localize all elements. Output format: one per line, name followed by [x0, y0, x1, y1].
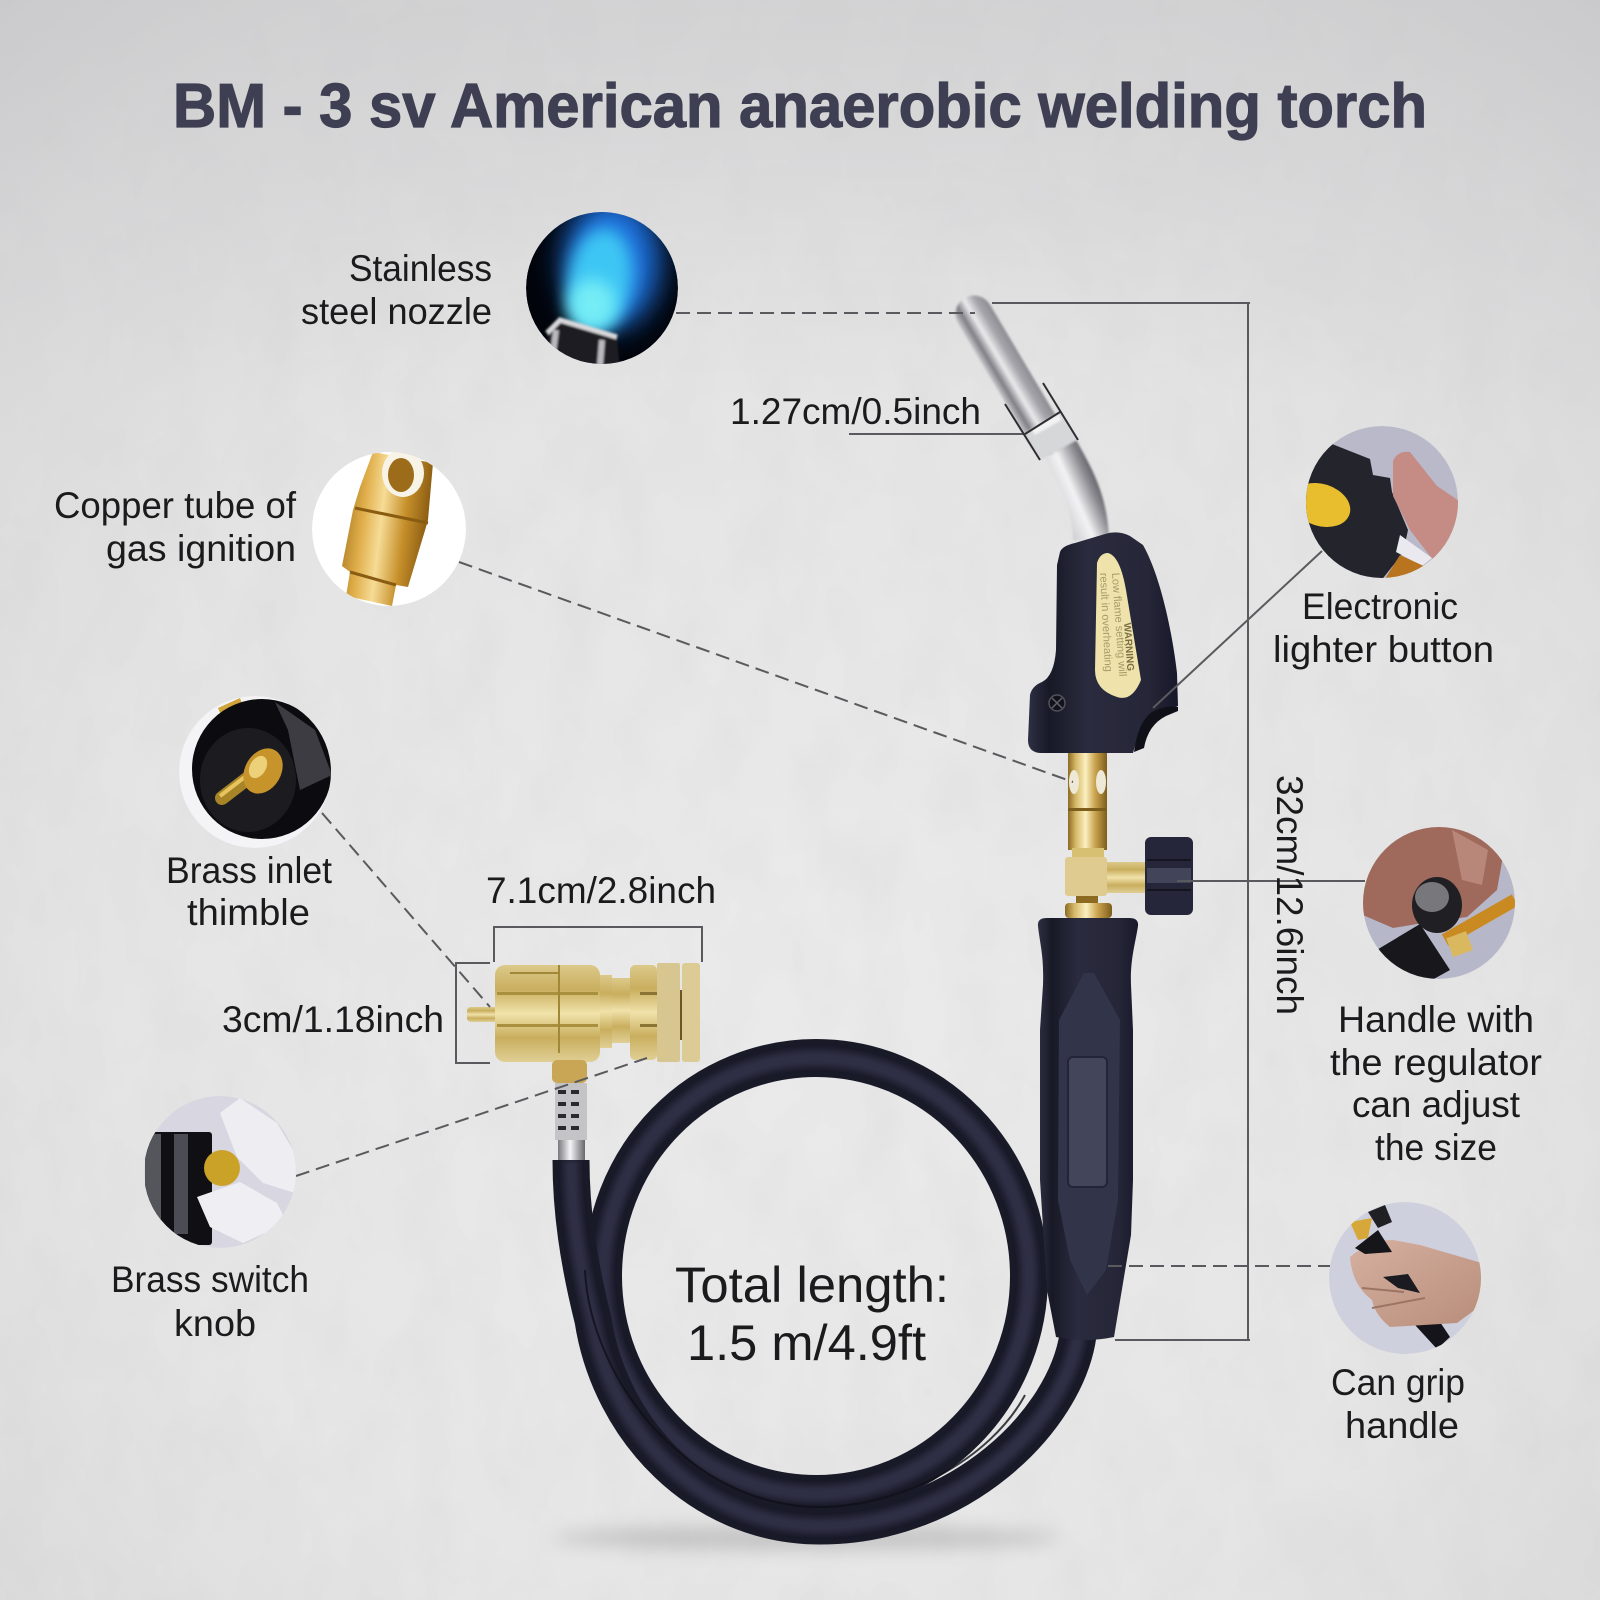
- icon: grip handle: [1329, 1202, 1484, 1354]
- label: Brass switch knob: [111, 1259, 309, 1344]
- regulator knob: [1145, 837, 1193, 915]
- label: Brass inlet thimble: [166, 850, 333, 933]
- icon: brass switch knob: [144, 1096, 297, 1248]
- brass tube below head: [1068, 753, 1107, 857]
- icon: copper tube: [312, 449, 466, 606]
- label: Stainless steel nozzle: [301, 248, 492, 332]
- dimension lines and leaders: [296, 303, 1365, 1340]
- warning label: WARNING: [1121, 622, 1135, 672]
- label: Brass switch knob: Brass switch: [111, 1259, 309, 1300]
- dimension label: connector diameter: 3cm/1.18inch: [222, 999, 444, 1040]
- label: Handle with the regulator: [1330, 999, 1542, 1168]
- title: BM - 3 sv American anaerobic welding torch: [173, 72, 1427, 141]
- label: Brass inlet thimble: Brass inlet: [166, 850, 333, 891]
- label: Can grip handle: handle: [1345, 1405, 1459, 1446]
- label: Handle with the regulator: can adjust: [1352, 1084, 1521, 1125]
- warning label: Low flame setting will: [1109, 572, 1128, 677]
- icon: brass inlet thimble: [179, 696, 332, 848]
- label: Electronic lighter button: lighter button: [1273, 629, 1494, 670]
- ground shadow: [551, 1527, 1061, 1549]
- label: Brass inlet thimble: thimble: [187, 892, 310, 933]
- warning label: [1095, 553, 1141, 698]
- brass regulator block: [1065, 857, 1145, 918]
- label: Handle with the regulator: the size: [1375, 1127, 1497, 1168]
- icon: electronic lighter button: [1306, 426, 1458, 578]
- icon: flame: [526, 212, 678, 364]
- torch head: [1028, 532, 1178, 753]
- total length callout: 1.5 m/4.9ft: [687, 1315, 926, 1371]
- total length callout: Total length:: [675, 1257, 949, 1313]
- label: Brass switch knob: knob: [174, 1303, 256, 1344]
- label: Stainless steel nozzle: steel nozzle: [301, 291, 492, 332]
- handle: [1038, 918, 1138, 1340]
- label: Can grip handle: Can grip: [1331, 1362, 1465, 1403]
- label: Can grip handle: [1331, 1362, 1465, 1446]
- hose coil: [571, 1058, 1078, 1526]
- label: Electronic lighter button: [1273, 586, 1494, 670]
- brass gas connector: [467, 963, 700, 1160]
- label: Stainless steel nozzle: Stainless: [349, 248, 492, 289]
- screw: [1049, 695, 1065, 711]
- nozzle tube: [974, 314, 1091, 540]
- label: Handle with the regulator: the regulator: [1330, 1042, 1542, 1083]
- label: Electronic lighter button: Electronic: [1302, 586, 1458, 627]
- warning label: result in overheating: [1097, 573, 1114, 672]
- label: Copper tube of gas ignition: Copper tube of: [54, 485, 297, 526]
- dimension label: connector length: 7.1cm/2.8inch: [486, 870, 716, 911]
- label: Copper tube of gas ignition: gas ignition: [106, 528, 296, 569]
- icon: handle regulator: [1358, 822, 1515, 985]
- label: Copper tube of gas ignition: [54, 485, 297, 569]
- label: Handle with the regulator: Handle with: [1338, 999, 1534, 1040]
- torch product: [467, 314, 1193, 1526]
- total length callout: [675, 1257, 949, 1371]
- dimension label: nozzle diameter: 1.27cm/0.5inch: [730, 391, 981, 432]
- dimension label: torch length: 32cm/12.6inch: [1269, 775, 1310, 1015]
